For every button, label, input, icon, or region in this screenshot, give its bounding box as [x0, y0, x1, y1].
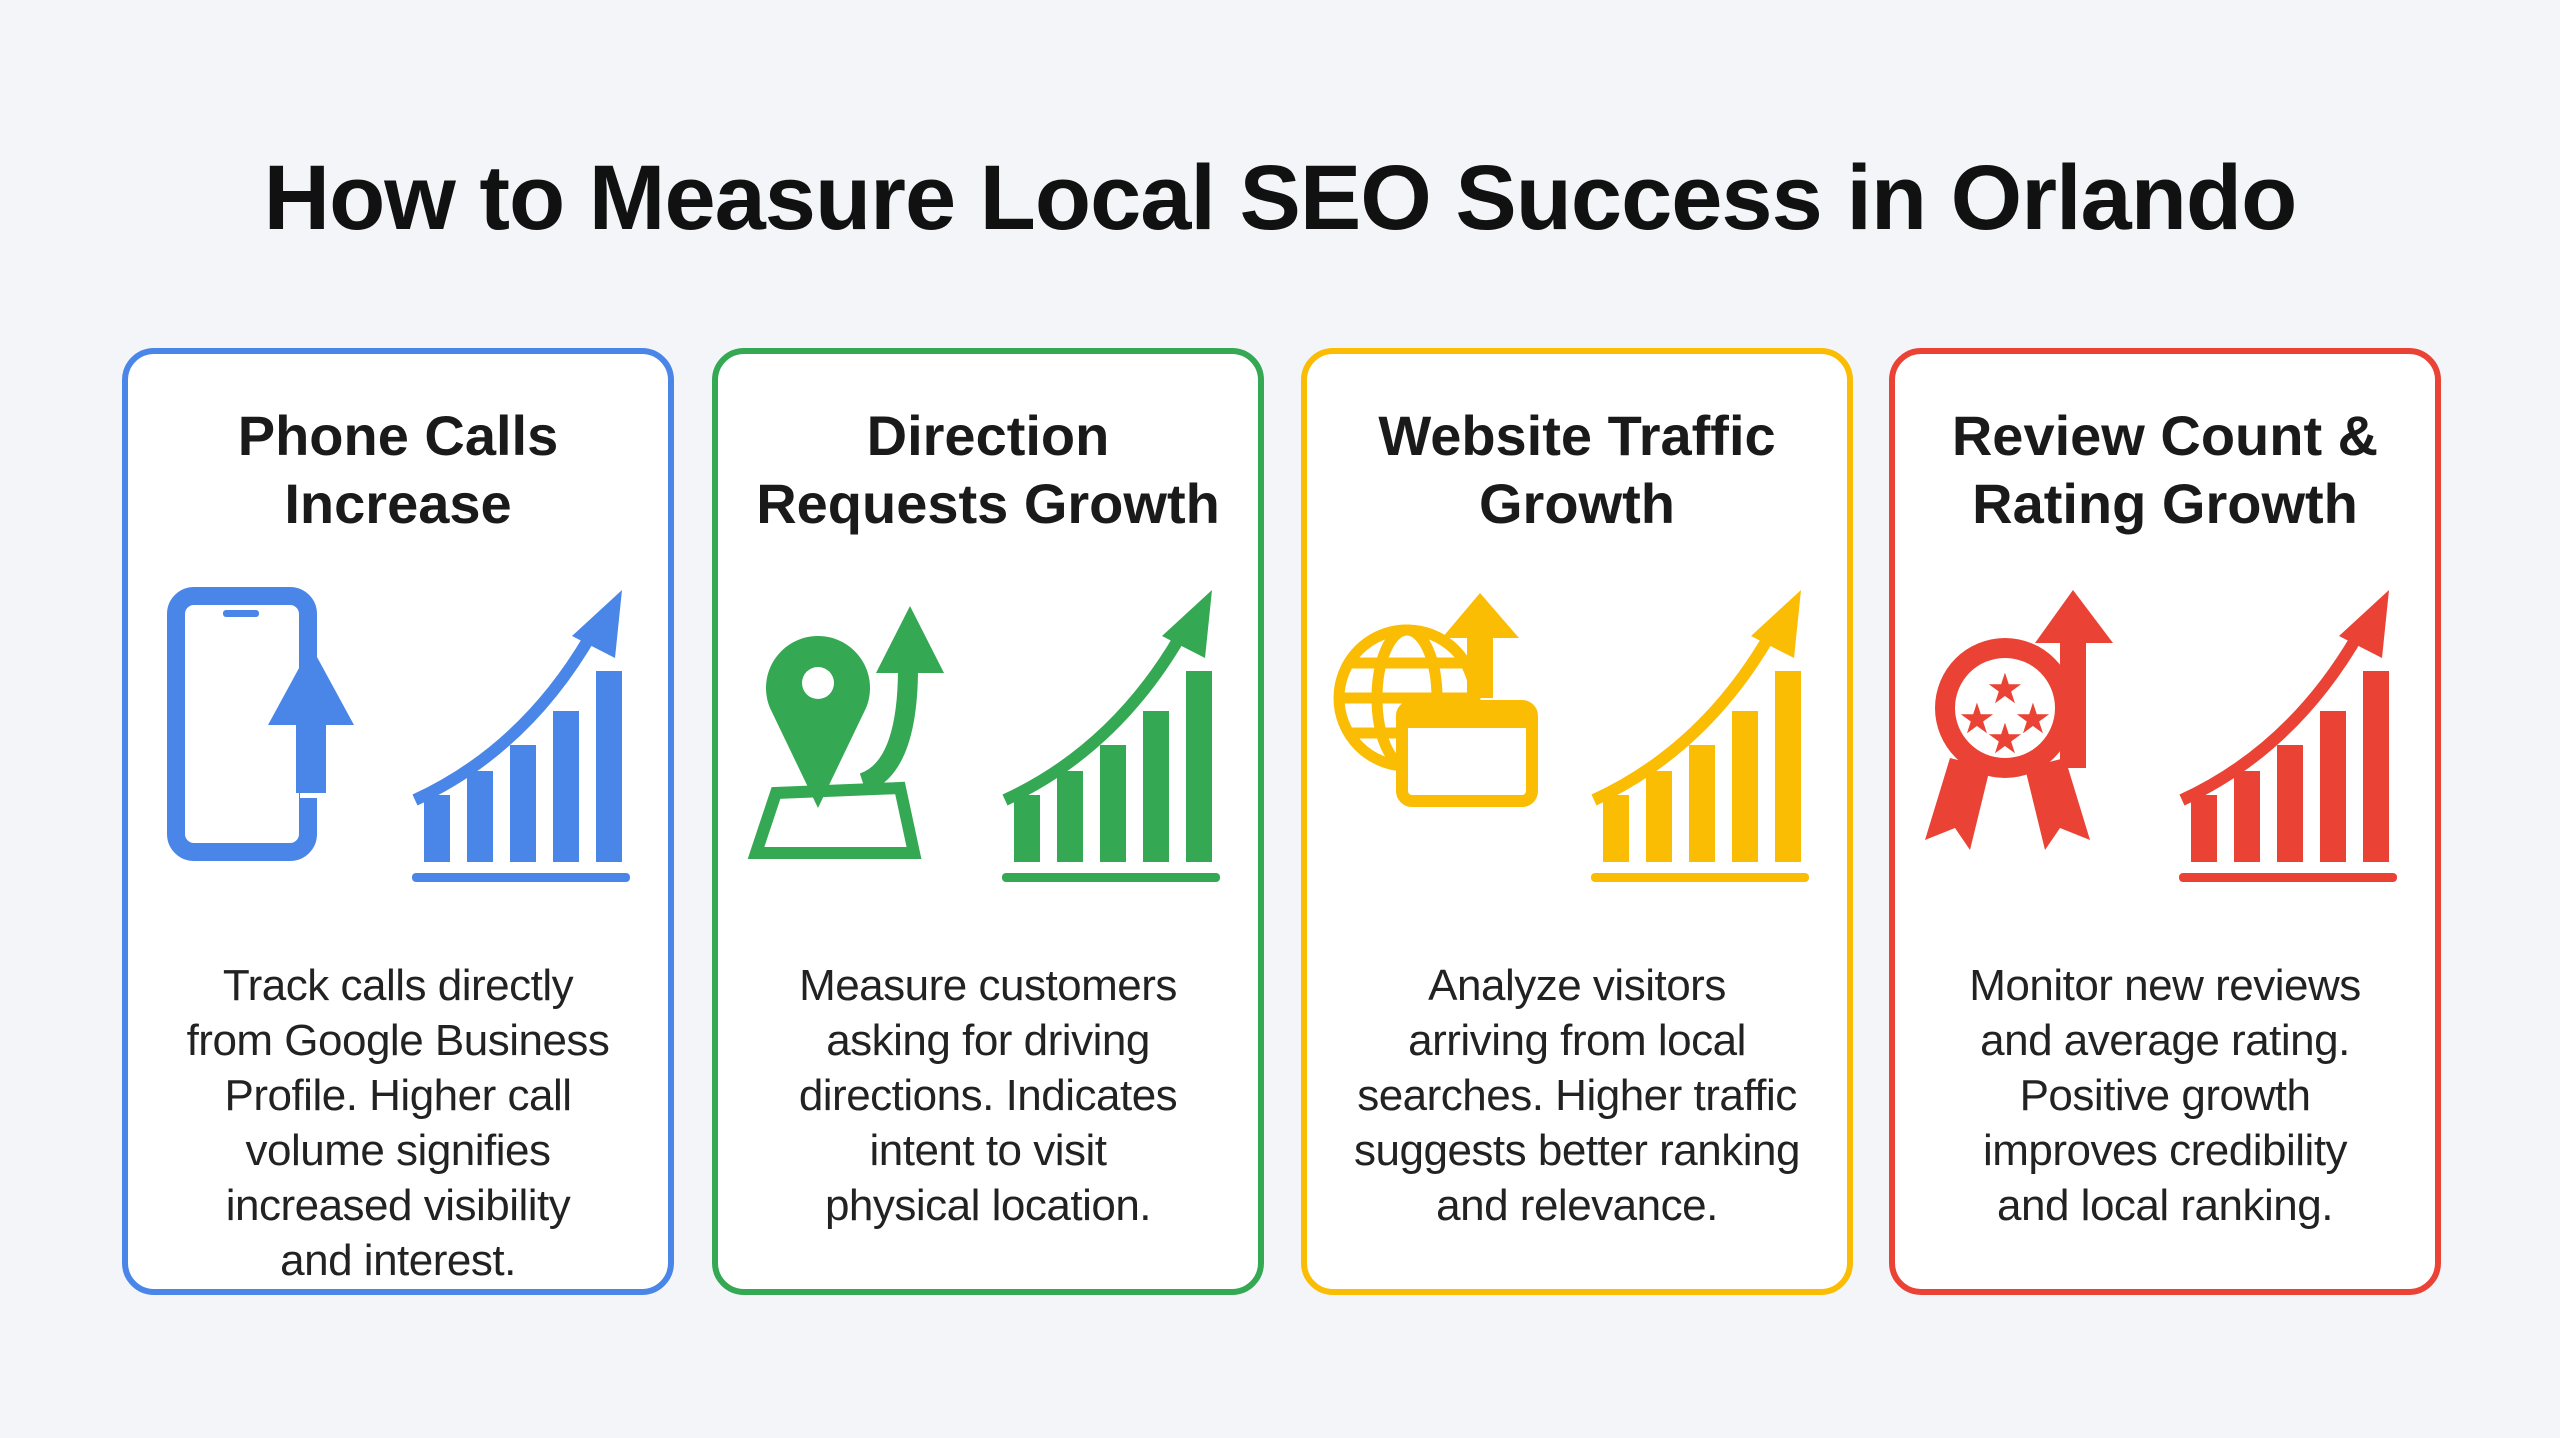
body text: Positive growth: [2020, 1071, 2310, 1120]
body text: Analyze visitors: [1428, 961, 1726, 1010]
icon: badge and chart: ★: [1986, 664, 2024, 713]
body text: increased visibility: [226, 1181, 570, 1230]
heading: Increase: [284, 472, 512, 535]
panel: website traffic: [1301, 348, 1853, 1295]
body text: [187, 961, 609, 1285]
heading: Growth: [1479, 472, 1675, 535]
heading: Phone Calls: [238, 404, 558, 467]
heading: Requests Growth: [756, 472, 1220, 535]
icon: globe browser and chart: [1334, 590, 1809, 882]
body text: suggests better ranking: [1354, 1126, 1800, 1175]
body text: from Google Business: [187, 1016, 609, 1065]
body text: Profile. Higher call: [224, 1071, 572, 1120]
icon: map pin and chart: [748, 590, 1220, 882]
icon: badge and chart: ★: [1958, 694, 1996, 743]
heading: [1378, 404, 1776, 535]
body text: and local ranking.: [1997, 1181, 2333, 1230]
heading: Direction: [867, 404, 1109, 467]
body text: [799, 961, 1177, 1230]
panel: reviews: [1889, 348, 2441, 1295]
icon: badge and chart: ★: [2014, 694, 2052, 743]
heading: [756, 404, 1220, 535]
body text: intent to visit: [869, 1126, 1107, 1175]
panel: phone calls: [122, 348, 674, 1295]
body text: and average rating.: [1980, 1016, 2350, 1065]
body text: volume signifies: [245, 1126, 551, 1175]
body text: and relevance.: [1436, 1181, 1718, 1230]
body text: and interest.: [280, 1236, 516, 1285]
body text: Monitor new reviews: [1969, 961, 2361, 1010]
body text: directions. Indicates: [799, 1071, 1177, 1120]
heading: Review Count &: [1952, 404, 2378, 467]
body text: [1969, 961, 2361, 1230]
body text: [1354, 961, 1800, 1230]
title: How to Measure Local SEO Success in Orlando: [264, 147, 2296, 249]
body text: Measure customers: [799, 961, 1177, 1010]
icon: badge and chart: ★: [1986, 714, 2024, 763]
body text: searches. Higher traffic: [1357, 1071, 1797, 1120]
icon: badge and chart: [1925, 590, 2397, 882]
heading: [1952, 404, 2378, 535]
heading: Rating Growth: [1972, 472, 2358, 535]
panel: direction requests: [712, 348, 1264, 1295]
body text: physical location.: [825, 1181, 1151, 1230]
heading: [238, 404, 558, 535]
body text: asking for driving: [826, 1016, 1150, 1065]
body text: arriving from local: [1408, 1016, 1746, 1065]
body text: improves credibility: [1983, 1126, 2347, 1175]
body text: Track calls directly: [223, 961, 573, 1010]
heading: Website Traffic: [1378, 404, 1776, 467]
icon: phone and chart: [167, 587, 630, 882]
